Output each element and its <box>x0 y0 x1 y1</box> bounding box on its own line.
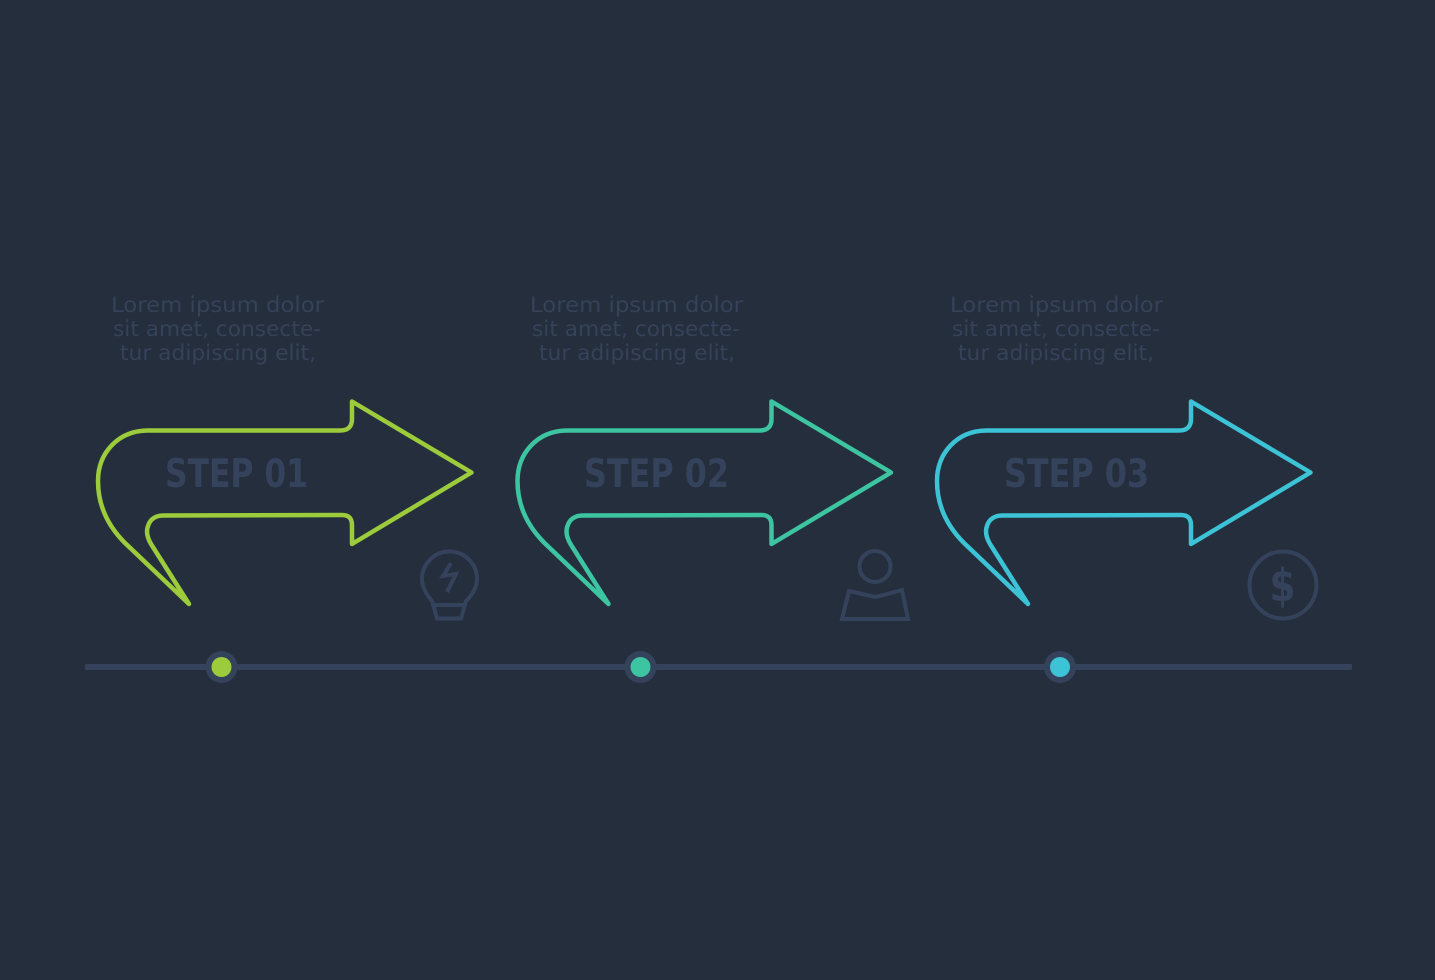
text block: step 02 description: Lorem ipsum dolor <box>530 293 743 318</box>
text block: step 02 description: sit amet, consecte- <box>532 317 740 342</box>
text block: step 03 description: Lorem ipsum dolor <box>950 293 1163 318</box>
text block: step 01 description: sit amet, consecte- <box>113 317 321 342</box>
timeline <box>85 651 1352 683</box>
heading: step 03: STEP 03 <box>1004 452 1149 497</box>
icon: dollar coin: $ <box>1270 559 1296 612</box>
panel: step 02 <box>518 293 908 619</box>
arrow: step 03 outline <box>937 402 1310 604</box>
arrow: step 02 outline <box>518 402 891 604</box>
icon: person on map <box>842 551 908 619</box>
heading: step 02: STEP 02 <box>584 452 729 497</box>
panel: step 01 <box>98 293 477 618</box>
timeline marker 3 <box>1044 651 1076 683</box>
text block: step 03 description: sit amet, consecte- <box>952 317 1160 342</box>
text block: step 01 description: tur adipiscing elit, <box>120 341 316 366</box>
text block: step 02 description: tur adipiscing elit, <box>539 341 735 366</box>
text block: step 03 description: tur adipiscing elit, <box>958 341 1154 366</box>
text block: step 01 description: Lorem ipsum dolor <box>111 293 324 318</box>
panel: step 03 <box>937 293 1316 618</box>
text block: step 02 description <box>530 293 743 366</box>
text block: step 01 description <box>111 293 324 366</box>
timeline marker 2 <box>624 651 656 683</box>
icon: dollar coin <box>1250 552 1316 618</box>
text block: step 03 description <box>950 293 1163 366</box>
arrow: step 01 outline <box>98 402 472 604</box>
icon: light bulb <box>422 552 477 618</box>
heading: step 01: STEP 01 <box>165 452 308 497</box>
timeline marker 1 <box>206 651 238 683</box>
